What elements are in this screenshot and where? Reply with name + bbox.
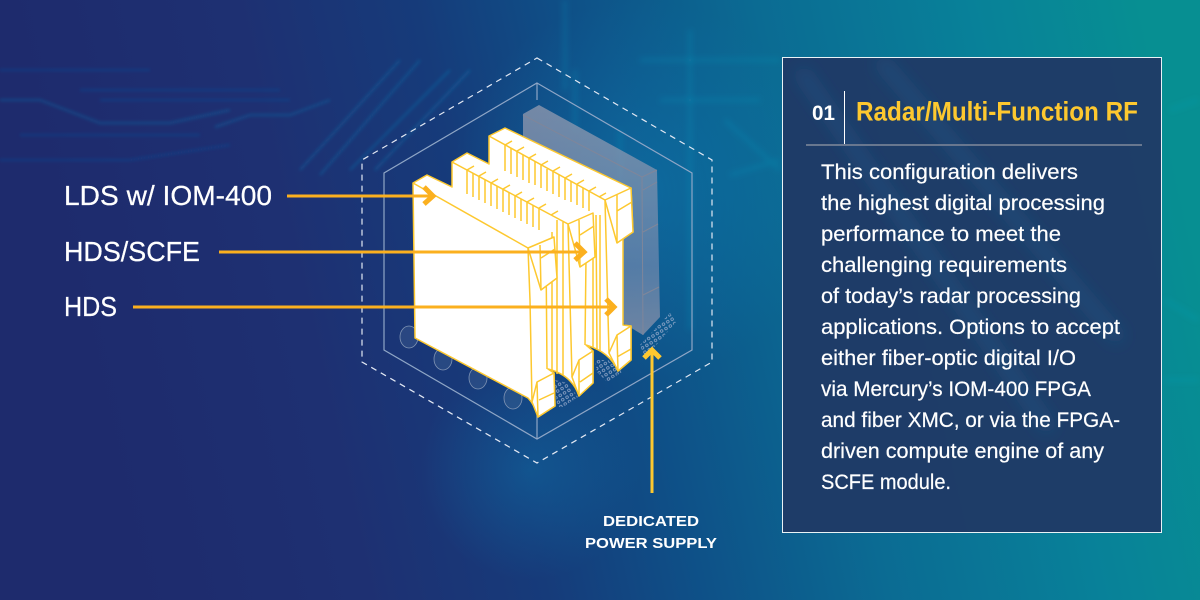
module silhouette — [413, 128, 633, 417]
chassis modules — [413, 128, 633, 417]
body text: performance to meet the — [821, 222, 1061, 246]
body text: This configuration delivers — [821, 160, 1078, 184]
label: HDS: HDS — [64, 291, 117, 322]
module 2 ridge and fins: HDS/SCFE — [452, 162, 572, 377]
label: dedicated power supply: POWER SUPPLY — [585, 535, 717, 552]
label: HDS/SCFE: HDS/SCFE — [64, 236, 200, 267]
label: dedicated power supply — [585, 513, 717, 552]
top handles — [528, 188, 633, 290]
body text: the highest digital processing — [821, 191, 1105, 215]
body text — [821, 160, 1120, 494]
connector circles — [400, 326, 522, 409]
arrow: power supply — [644, 350, 660, 493]
body text: challenging requirements — [821, 253, 1067, 277]
label: LDS w/ IOM-400: LDS w/ IOM-400 — [64, 180, 272, 211]
body text: via Mercury’s IOM-400 FPGA — [821, 377, 1092, 401]
body text: applications. Options to accept — [821, 315, 1120, 339]
body text: either fiber-optic digital I/O — [821, 346, 1076, 370]
power supply back plate — [523, 105, 660, 335]
body text: driven compute engine of any — [821, 439, 1104, 463]
arrow: LDS — [287, 187, 433, 204]
body text: of today’s radar processing — [821, 284, 1081, 308]
module 3 ridge and fins: HDS — [489, 136, 609, 353]
section number: 01 — [812, 102, 835, 125]
panel heading: Radar/Multi-Function RF — [856, 96, 1138, 126]
label: dedicated power supply: DEDICATED — [603, 513, 699, 530]
module 1 edge: LDS — [413, 183, 532, 402]
arrow: HDS — [133, 299, 614, 315]
hexagon frames — [362, 58, 712, 463]
body text: and fiber XMC, or via the FPGA- — [821, 408, 1120, 432]
panel: Radar/Multi-Function RF — [782, 58, 1162, 532]
body text: SCFE module. — [821, 470, 951, 494]
bottom handles — [532, 326, 631, 417]
arrow: HDS/SCFE — [219, 243, 584, 260]
vent dots — [555, 313, 676, 407]
